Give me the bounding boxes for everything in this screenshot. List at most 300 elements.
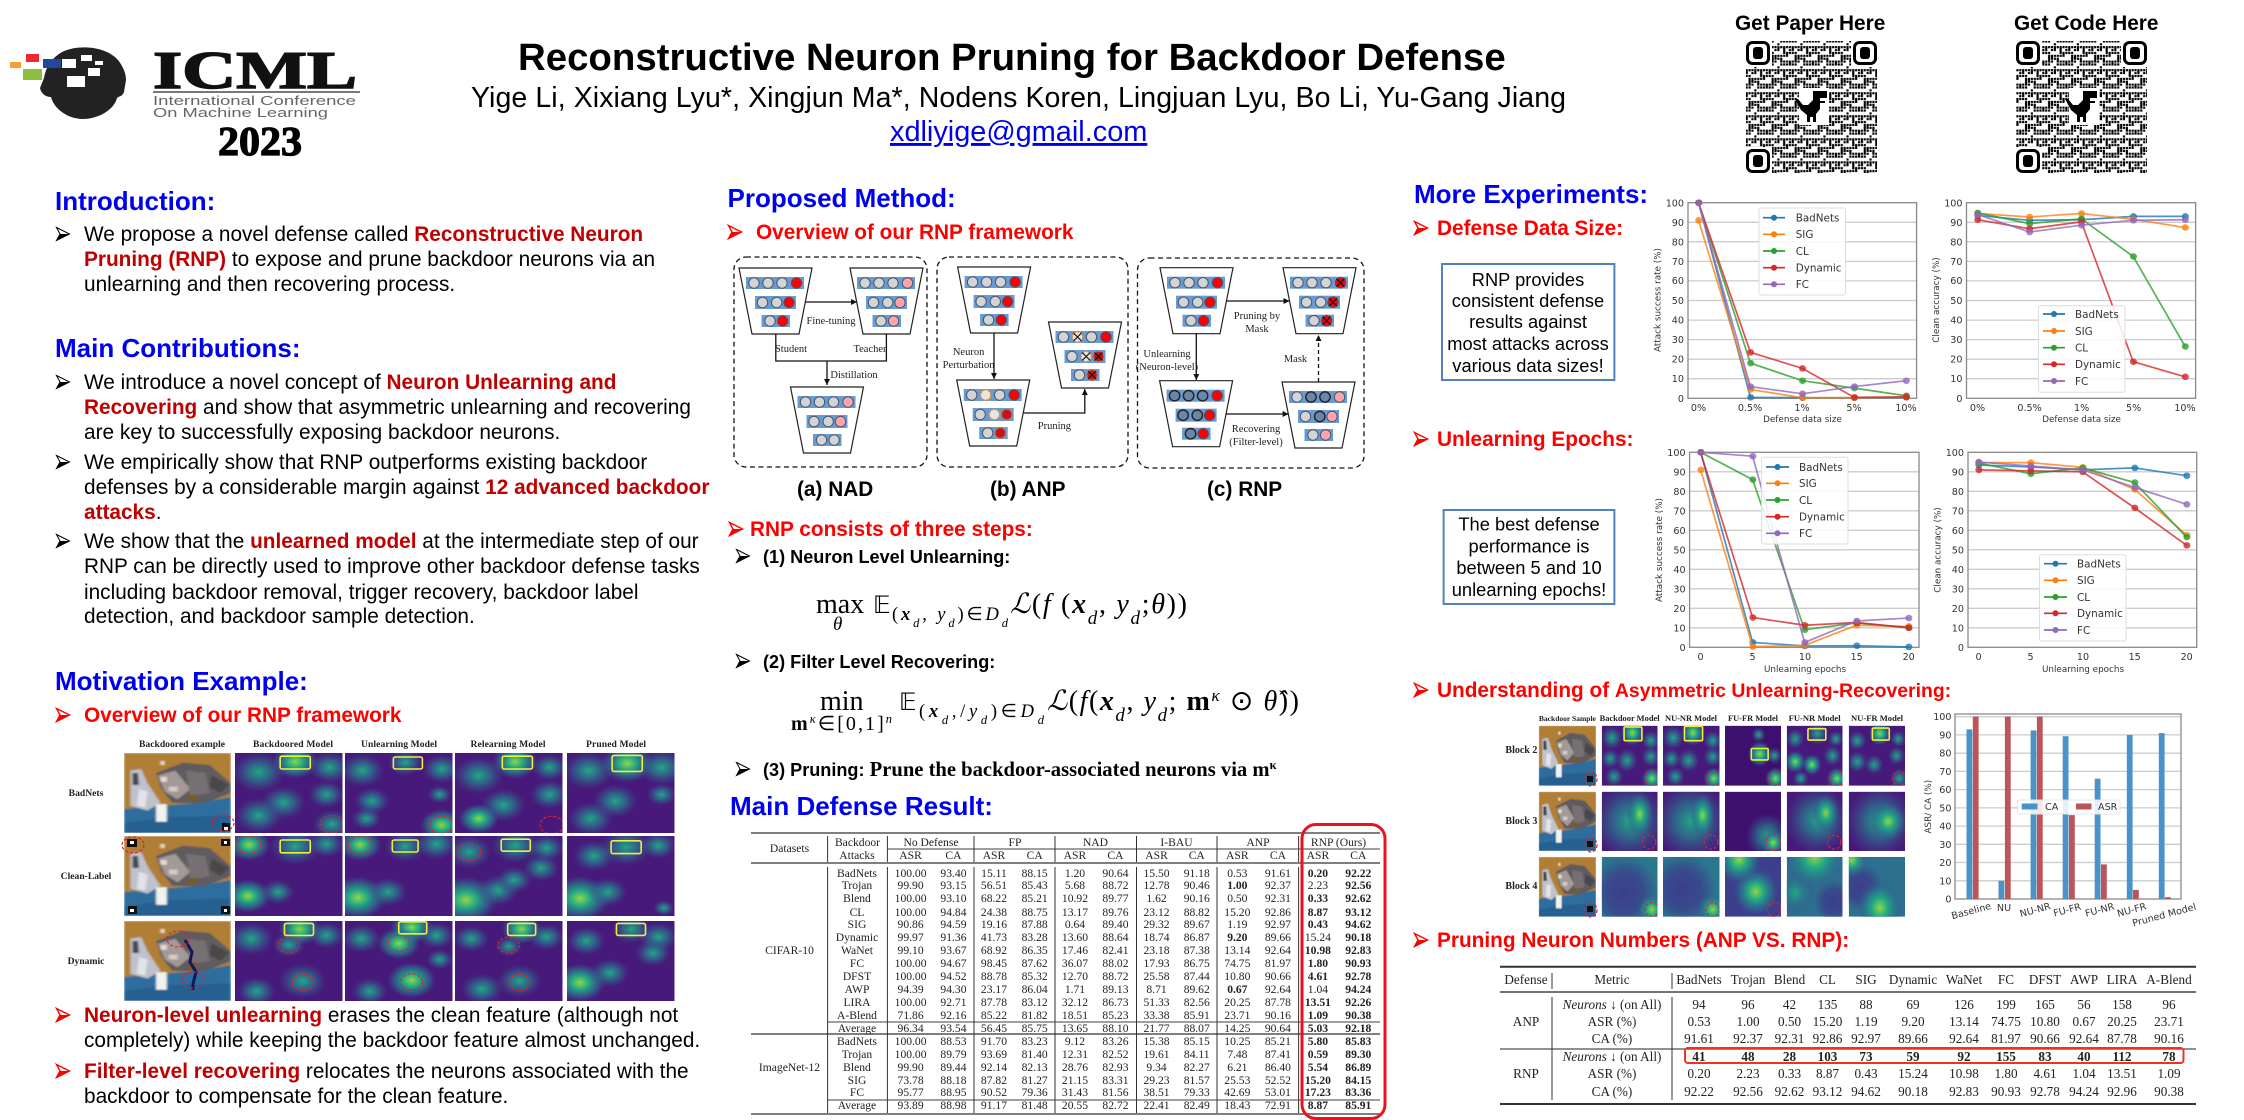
table: main defense result: 41.73 [981, 931, 1007, 944]
chart: clean accuracy vs unlearning epochs: Clean accuracy (%) [1934, 507, 1944, 593]
table: main defense result: CA [1270, 848, 1286, 862]
panel: RNP diagram: Recovering [1232, 424, 1281, 435]
formula: neuron level unlearning: (xd, yd)∈Dd [892, 605, 1009, 630]
table: main defense result: 83.23 [1022, 1034, 1048, 1048]
chart: clean accuracy vs unlearning epochs: CL [2077, 592, 2090, 604]
table: main defense result: 0.20 [1308, 866, 1328, 880]
table: main defense result: 98.45 [981, 957, 1007, 970]
table: main defense result: 85.43 [1022, 879, 1048, 892]
subheading: Pruning Neuron Numbers: Pruning Neuron Numbers (ANP VS. RNP): [1437, 929, 1849, 952]
table: main defense result: 85.23 [1102, 1008, 1128, 1022]
table: main defense result: 85.21 [1265, 1034, 1291, 1048]
table: main defense result: 82.52 [1102, 1048, 1128, 1060]
table: main defense result: 88.64 [1102, 931, 1128, 944]
table: main defense result: 86.40 [1265, 1060, 1291, 1074]
table: main defense result: 5.54 [1308, 1060, 1328, 1074]
table: main defense result: 15.50 [1144, 866, 1170, 880]
formula: filter level recovering: mκ∈[0,1]n [791, 712, 892, 735]
figure: block heatmaps: NU-NR Model [1665, 714, 1718, 723]
table: main defense result: 90.38 [1345, 1008, 1371, 1022]
table: main defense result: 85.75 [1022, 1022, 1048, 1034]
chart: clean accuracy vs unlearning epochs: 60 [1952, 526, 1964, 537]
text block: contributions [56, 371, 709, 628]
figure: motivation heatmaps: BadNets [69, 788, 104, 799]
table: main defense result: 91.70 [981, 1034, 1007, 1048]
chart: clean accuracy vs unlearning epochs: 20 [1952, 604, 1964, 615]
chart: clean accuracy vs unlearning epochs [1934, 448, 2197, 675]
chart: ASR and CA bar chart: ASR [2098, 802, 2118, 813]
table: pruning neuron numbers: 0.43 [1854, 1066, 1878, 1080]
table: pruning neuron numbers: 9.20 [1901, 1014, 1925, 1028]
figure: motivation heatmaps: Backdoored example [139, 739, 226, 750]
logo: ICML 2023 [10, 42, 360, 164]
chart: clean accuracy vs defense data size: Dynamic [2075, 359, 2121, 371]
caption: ANP: (b) ANP [990, 478, 1066, 501]
table: main defense result: 0.67 [1227, 982, 1247, 996]
formula: filter level recovering: (x d,/y d)∈D d [919, 702, 1045, 727]
figure: block heatmaps: Block 3 [1505, 816, 1537, 827]
chart: ASR and CA bar chart: 20 [1939, 858, 1952, 869]
table: main defense result: 84.11 [1184, 1048, 1210, 1060]
text block: unlearning and recovering findings: Neuron-level unlearning erases the clean feature (although not [84, 1004, 678, 1027]
table: main defense result: 94.59 [940, 918, 967, 931]
QR: code: Get Code Here [2014, 12, 2158, 35]
table: pruning neuron numbers: 88 [1859, 996, 1873, 1012]
table: main defense result: 90.86 [898, 918, 924, 931]
table: main defense result: 88.72 [1102, 879, 1128, 892]
table: main defense result: 90.64 [1265, 1022, 1291, 1034]
chart: clean accuracy vs defense data size: 100 [1944, 198, 1962, 210]
table: main defense result: 84.15 [1345, 1074, 1371, 1086]
chart: ASR and CA bar chart: 40 [1939, 822, 1952, 833]
chart: attack success rate vs unlearning epochs: 10 [1673, 624, 1686, 634]
subheading: overview: Overview of our RNP framework [84, 704, 402, 727]
chart: ASR and CA bar chart: 30 [1939, 840, 1952, 851]
table: main defense result: 89.44 [940, 1060, 967, 1074]
table: main defense result: 82.56 [1184, 996, 1210, 1008]
table: main defense result: ImageNet-12 [759, 1060, 820, 1074]
chart: attack success rate vs unlearning epochs: 90 [1673, 468, 1686, 478]
table: main defense result: 96.34 [898, 1022, 924, 1034]
table: main defense result: 1.62 [1146, 892, 1167, 905]
panel: NAD diagram: Distillation [830, 370, 878, 381]
chart: attack success rate vs unlearning epochs: Dynamic [1799, 512, 1845, 524]
table: main defense result: 87.44 [1184, 970, 1210, 982]
table: pruning neuron numbers: 89.66 [1898, 1030, 1928, 1046]
chart: clean accuracy vs unlearning epochs: BadNets [2077, 558, 2121, 570]
step 1 label: (1) Neuron Level Unlearning: [763, 547, 1010, 567]
logo: ICML 2023: 2023 [218, 118, 302, 164]
chart: attack success rate vs unlearning epochs: 40 [1673, 565, 1686, 576]
table: main defense result: 19.61 [1144, 1048, 1170, 1060]
table: main defense result: 91.17 [981, 1099, 1007, 1112]
table: pruning neuron numbers: AWP [2070, 972, 2098, 986]
table: pruning neuron numbers: 59 [1906, 1048, 1920, 1064]
table: main defense result: ASR [1307, 848, 1329, 862]
chart: clean accuracy vs defense data size: 90 [1950, 218, 1962, 229]
table: main defense result: 15.11 [981, 866, 1007, 880]
table: main defense result: 15.38 [1144, 1034, 1170, 1048]
chart: attack success rate vs defense data size [1654, 198, 1917, 425]
table: main defense result: 100.00 [895, 957, 927, 970]
table: main defense result: 93.40 [940, 866, 967, 880]
table: main defense result: 53.01 [1265, 1086, 1291, 1099]
table: main defense result: Trojan [842, 879, 872, 892]
table: main defense result: Dynamic [836, 931, 878, 944]
table: main defense result: 23.12 [1144, 906, 1170, 918]
chart: attack success rate vs defense data size: 70 [1672, 257, 1684, 268]
table: main defense result: 92.26 [1345, 996, 1371, 1008]
table: main defense result: WaNet [841, 944, 873, 956]
table: main defense result: 10.25 [1224, 1034, 1250, 1048]
table: main defense result: 25.53 [1224, 1074, 1250, 1086]
panel: RNP diagram [1136, 258, 1364, 468]
table: pruning neuron numbers: 93.12 [1813, 1084, 1842, 1098]
figure: motivation heatmaps: Pruned Model [586, 739, 646, 750]
formula: neuron level unlearning: θ [833, 614, 842, 635]
chart: ASR and CA bar chart: 90 [1939, 730, 1952, 741]
table: pruning neuron numbers: FC [1998, 972, 2014, 986]
table: main defense result: 15.24 [1305, 931, 1331, 944]
table: main defense result: 28.76 [1062, 1060, 1088, 1074]
chart: clean accuracy vs defense data size: BadNets [2075, 309, 2119, 321]
table: main defense result: CA [1107, 848, 1124, 862]
table: main defense result: 1.71 [1065, 982, 1085, 996]
chart: ASR and CA bar chart: 60 [1939, 785, 1952, 796]
table: main defense result: ASR [899, 848, 922, 862]
chart: attack success rate vs unlearning epochs: FC [1799, 528, 1812, 540]
table: main defense result: 94.62 [1345, 918, 1371, 931]
formula: neuron level unlearning: ℒ(f (xd, yd;θ)) [1010, 589, 1187, 628]
table: pruning neuron numbers: 126 [1954, 996, 1974, 1012]
subheading: framework overview: Overview of our RNP framework [756, 221, 1074, 244]
chart: ASR and CA bar chart: FU-NR [2084, 901, 2116, 920]
table: main defense result: 88.75 [1022, 906, 1048, 918]
chart: attack success rate vs defense data size: 0 [1678, 394, 1684, 405]
table: main defense result: 83.36 [1345, 1086, 1371, 1099]
table: main defense result: 82.72 [1102, 1099, 1128, 1112]
table: pruning neuron numbers: 87.78 [2107, 1030, 2137, 1046]
panel: ANP diagram: Pruning [1038, 421, 1072, 432]
table: main defense result: 5.03 [1308, 1022, 1328, 1034]
table: pruning neuron numbers: 0.50 [1778, 1014, 1801, 1028]
table: main defense result: 87.78 [1265, 996, 1291, 1008]
chart: clean accuracy vs unlearning epochs: 80 [1952, 487, 1964, 498]
caption: RNP: (c) RNP [1207, 478, 1282, 501]
text block: contributions: RNP can be directly used to improve other backdoor defense tasks [84, 555, 700, 578]
table: main defense result: 86.04 [1022, 982, 1048, 996]
table: main defense result: 87.78 [981, 996, 1007, 1008]
table: main defense result: 82.41 [1102, 944, 1128, 956]
table: main defense result: Blend [843, 1060, 871, 1074]
table: pruning neuron numbers: SIG [1855, 972, 1877, 986]
chart: clean accuracy vs defense data size: 80 [1950, 238, 1962, 248]
table: main defense result: 10.80 [1224, 970, 1250, 982]
table: pruning neuron numbers: 199 [1996, 996, 2016, 1012]
table: pruning neuron numbers: 1.19 [1854, 1014, 1878, 1028]
chart: attack success rate vs defense data size: 100 [1666, 198, 1684, 210]
text block: contributions: attacks. [84, 501, 161, 524]
table: main defense result: 15.20 [1305, 1074, 1331, 1086]
table: pruning neuron numbers: 20.25 [2107, 1014, 2137, 1028]
table: main defense result: 22.41 [1144, 1099, 1170, 1112]
table: main defense result: No Defense [903, 836, 959, 848]
chart: clean accuracy vs defense data size: FC [2075, 376, 2088, 388]
chart: clean accuracy vs unlearning epochs: 100 [1946, 448, 1964, 459]
table: pruning neuron numbers: 23.71 [2154, 1014, 2184, 1028]
table: pruning neuron numbers: 92.37 [1733, 1030, 1763, 1046]
formula: filter level recovering: 𝔼 [899, 688, 917, 716]
chart: attack success rate vs unlearning epochs: 10 [1799, 652, 1811, 663]
table: main defense result: 56.45 [981, 1022, 1007, 1034]
QR: paper [1735, 12, 1885, 175]
subheading: Understanding of Asymmetric Unlearning-Recovering: Understanding of Asymmetric Unlearning-Recovering: [1437, 679, 1951, 702]
table: pruning neuron numbers: 73 [1859, 1048, 1873, 1064]
table: pruning neuron numbers: 1.00 [1736, 1014, 1760, 1028]
table: main defense result: AWP [845, 982, 869, 996]
table: main defense result: 5.80 [1308, 1034, 1328, 1048]
heading: Motivation Example: Motivation Example: [55, 666, 308, 696]
caption: NAD: (a) NAD [797, 478, 873, 501]
table: main defense result: 9.12 [1065, 1034, 1085, 1048]
callout: data size [1442, 264, 1614, 380]
logo: ICML 2023: On Machine Learning [153, 105, 328, 120]
table: main defense result: 36.07 [1062, 957, 1088, 970]
chart: clean accuracy vs unlearning epochs: 20 [2181, 652, 2193, 663]
chart: clean accuracy vs defense data size: 30 [1950, 335, 1962, 346]
table: main defense result: 14.25 [1224, 1022, 1250, 1034]
table: main defense result: 51.33 [1144, 996, 1170, 1008]
table: main defense result: 94.52 [940, 970, 967, 982]
table: main defense result: 89.13 [1102, 982, 1128, 996]
table: main defense result: 8.87 [1308, 1099, 1328, 1112]
table: pruning neuron numbers: 158 [2112, 996, 2132, 1012]
table: main defense result: 21.15 [1062, 1074, 1088, 1086]
table: main defense result: 89.62 [1184, 982, 1210, 996]
table: main defense result: 13.65 [1062, 1022, 1088, 1034]
table: main defense result: 23.18 [1144, 944, 1170, 956]
table: main defense result: 9.20 [1227, 931, 1247, 944]
table: pruning neuron numbers: 42 [1783, 996, 1796, 1012]
table: main defense result: 13.60 [1062, 931, 1088, 944]
table: main defense result: Blend [843, 892, 871, 905]
chart: ASR and CA bar chart: NU-NR [2019, 901, 2052, 920]
figure: block heatmaps: Backdoor Sample [1539, 714, 1596, 723]
chart: attack success rate vs unlearning epochs: BadNets [1799, 462, 1843, 474]
panel: ANP diagram [937, 257, 1128, 467]
table: main defense result: 81.82 [1022, 1008, 1048, 1022]
table: main defense result: RNP (Ours) [1311, 836, 1366, 848]
subheading: three steps: RNP consists of three steps: [750, 518, 1033, 541]
chart: attack success rate vs unlearning epochs: 15 [1851, 652, 1863, 663]
chart: clean accuracy vs unlearning epochs: 0 [1976, 652, 1982, 663]
chart: clean accuracy vs unlearning epochs: 30 [1952, 584, 1964, 596]
table: main defense result: 90.93 [1345, 957, 1371, 970]
chart: ASR and CA bar chart: 70 [1939, 767, 1952, 778]
table: main defense result: 0.59 [1308, 1048, 1328, 1060]
table: main defense result: 12.70 [1062, 970, 1088, 982]
table: main defense result: 20.25 [1224, 996, 1250, 1008]
table: main defense result: 82.13 [1022, 1060, 1048, 1074]
table: main defense result: 18.74 [1144, 931, 1170, 944]
table: main defense result: CIFAR-10 [765, 944, 814, 956]
chart: attack success rate vs defense data size: 90 [1672, 218, 1684, 229]
table: main defense result: 29.32 [1144, 918, 1170, 931]
figure: block heatmaps: Block 2 [1505, 745, 1537, 756]
formula: filter level recovering [791, 686, 1299, 735]
table: main defense result: 88.02 [1102, 957, 1128, 970]
table: pruning neuron numbers: 92 [1957, 1048, 1971, 1064]
heading: Main Defense Result: Main Defense Result: [730, 791, 993, 821]
table: main defense result: 23.71 [1224, 1008, 1250, 1022]
table: main defense result: 94.39 [898, 982, 924, 996]
table: main defense result: 2.23 [1308, 879, 1328, 892]
table: main defense result: CA [945, 848, 962, 862]
table: main defense result: 81.56 [1102, 1086, 1128, 1099]
table: main defense result: ASR [1226, 848, 1249, 862]
table: main defense result: 83.31 [1102, 1074, 1128, 1086]
table: main defense result: BadNets [837, 1034, 877, 1048]
panel: RNP diagram: (Filter-level) [1229, 437, 1283, 448]
table: main defense result: 91.36 [940, 931, 967, 944]
table: main defense result: 81.97 [1265, 957, 1291, 970]
email link: xdliyige@gmail.com [890, 116, 1147, 148]
chart: clean accuracy vs defense data size: 40 [1950, 316, 1962, 326]
table: main defense result: 93.12 [1345, 906, 1371, 918]
table: main defense result: 92.37 [1265, 879, 1291, 892]
table: pruning neuron numbers: 48 [1741, 1048, 1755, 1064]
table: pruning neuron numbers: 74.75 [1991, 1014, 2021, 1028]
panel: NAD diagram: Fine-tuning [806, 316, 856, 327]
table: main defense result: ANP [1246, 836, 1270, 848]
table: main defense result: 79.33 [1184, 1086, 1210, 1099]
table: pruning neuron numbers: 96 [2162, 996, 2176, 1012]
table: main defense result: 89.40 [1102, 918, 1128, 931]
QR: code [2014, 12, 2158, 175]
table: pruning neuron numbers: LIRA [2107, 972, 2137, 986]
table: main defense result: 92.31 [1265, 892, 1291, 905]
table: pruning neuron numbers: Neurons ↓ (on All) [1563, 996, 1661, 1012]
table: main defense result: 87.62 [1022, 957, 1048, 970]
table: main defense result: 1.09 [1308, 1008, 1328, 1022]
chart: ASR and CA bar chart: ASR/ CA (%) [1924, 780, 1934, 834]
table: main defense result: 0.43 [1308, 918, 1328, 931]
authors: Yige Li, Xixiang Lyu*, Xingjun Ma*, Nodens Koren, Lingjuan Lyu, Bo Li, Yu-Gang Jiang [471, 82, 1566, 114]
chart: attack success rate vs defense data size: 0.5% [1738, 403, 1762, 414]
subheading: Unlearning Epochs: Unlearning Epochs: [1437, 428, 1633, 451]
table: main defense result: 88.78 [981, 970, 1007, 982]
table: main defense result: 17.23 [1305, 1086, 1331, 1099]
table: pruning neuron numbers: 135 [1818, 996, 1837, 1012]
table: main defense result: 82.27 [1184, 1060, 1210, 1074]
table: main defense result: 85.32 [1022, 970, 1048, 982]
table: main defense result: 90.16 [1265, 1008, 1291, 1022]
table: main defense result: 90.16 [1184, 892, 1210, 905]
figure: motivation heatmaps: Clean-Label [61, 871, 112, 882]
chart: attack success rate vs unlearning epochs: 20 [1903, 652, 1915, 663]
table: main defense result: 99.97 [898, 931, 924, 944]
table: main defense result: 94.67 [940, 957, 967, 970]
formula: neuron level unlearning: 𝔼 [873, 591, 891, 619]
table: main defense result: 92.62 [1345, 892, 1371, 905]
table: main defense result: 93.67 [940, 944, 967, 956]
panel: RNP diagram: Pruning by [1234, 311, 1281, 322]
table: main defense result: 91.18 [1184, 866, 1210, 880]
table: main defense result: 88.98 [940, 1099, 967, 1112]
table: main defense result: 6.21 [1227, 1060, 1247, 1074]
table: main defense result: Attacks [839, 848, 875, 862]
table: main defense result: 100.00 [895, 1048, 927, 1060]
table: main defense result: 0.64 [1065, 918, 1085, 931]
chart: clean accuracy vs defense data size: SIG [2075, 326, 2093, 338]
chart: attack success rate vs defense data size: Defense data size [1763, 415, 1842, 425]
table: main defense result: 8.87 [1308, 906, 1328, 918]
table: pruning neuron numbers: ASR (%) [1588, 1014, 1636, 1028]
table: pruning neuron numbers: Dynamic [1889, 972, 1937, 986]
table: main defense result: 82.49 [1184, 1099, 1210, 1112]
chart: attack success rate vs defense data size: 40 [1672, 316, 1684, 326]
table: main defense result: 88.10 [1102, 1022, 1128, 1034]
panel: RNP diagram: Mask [1245, 324, 1269, 335]
table: pruning neuron numbers: 90.66 [2030, 1030, 2060, 1046]
chart: clean accuracy vs unlearning epochs: Dynamic [2077, 608, 2123, 620]
table: main defense result: SIG [848, 1074, 866, 1086]
table: main defense result: 38.51 [1144, 1086, 1170, 1099]
chart: attack success rate vs defense data size: CL [1796, 246, 1809, 258]
table: main defense result: 81.27 [1022, 1074, 1048, 1086]
chart: attack success rate vs unlearning epochs: 80 [1673, 487, 1686, 498]
text block: unlearning and recovering findings: backdoor to compensate for the clean feature. [84, 1085, 508, 1108]
table: main defense result: 92.16 [940, 1008, 967, 1022]
table: pruning neuron numbers: 92.83 [1949, 1084, 1979, 1098]
callout: unlearning epochs: The best defense [1458, 514, 1600, 535]
chart: attack success rate vs unlearning epochs: 0 [1698, 652, 1704, 663]
table: main defense result: CL [850, 906, 864, 918]
table: main defense result: 12.78 [1144, 879, 1170, 892]
table: pruning neuron numbers: 0.20 [1687, 1066, 1711, 1080]
table: pruning neuron numbers: 13.14 [1949, 1014, 1979, 1028]
chart: clean accuracy vs defense data size: 10 [1950, 374, 1962, 385]
table: main defense result: A-Blend [837, 1008, 877, 1022]
table: main defense result: 100.00 [895, 970, 927, 982]
text block: unlearning and recovering findings: Filter-level recovering relocates the neurons associated with the [84, 1060, 689, 1083]
table: pruning neuron numbers: 92.97 [1851, 1030, 1881, 1046]
chart: attack success rate vs defense data size: 10% [1895, 403, 1917, 414]
text block: introduction [56, 223, 655, 296]
table: pruning neuron numbers: 0.67 [2072, 1014, 2096, 1028]
table: pruning neuron numbers: 10.98 [1949, 1066, 1979, 1080]
table: main defense result: 94.30 [940, 982, 967, 996]
table: main defense result: 86.87 [1184, 931, 1210, 944]
table: main defense result: 32.12 [1062, 996, 1088, 1008]
table: main defense result: 93.15 [940, 879, 967, 892]
table: main defense result: Average [838, 1099, 876, 1112]
table: pruning neuron numbers: 155 [1996, 1048, 2016, 1064]
table: pruning neuron numbers: 2.23 [1736, 1066, 1760, 1080]
chart: clean accuracy vs defense data size: 5% [2126, 403, 2141, 414]
text block: contributions: including backdoor removal, trigger recovery, backdoor label [84, 581, 638, 604]
table: pruning neuron numbers: 92.56 [1733, 1084, 1763, 1098]
table: main defense result: 74.75 [1224, 957, 1250, 970]
table: main defense result: 56.51 [981, 879, 1007, 892]
title: Reconstructive Neuron Pruning for Backdoor Defense [518, 36, 1506, 79]
heading: Introduction: Introduction: [55, 186, 215, 216]
table: pruning neuron numbers: CA (%) [1592, 1084, 1632, 1098]
panel: NAD diagram: Student [775, 344, 807, 355]
table: main defense result: 31.43 [1062, 1086, 1088, 1099]
chart: clean accuracy vs defense data size: 20 [1950, 354, 1962, 366]
chart: clean accuracy vs defense data size: Clean accuracy (%) [1932, 257, 1942, 343]
